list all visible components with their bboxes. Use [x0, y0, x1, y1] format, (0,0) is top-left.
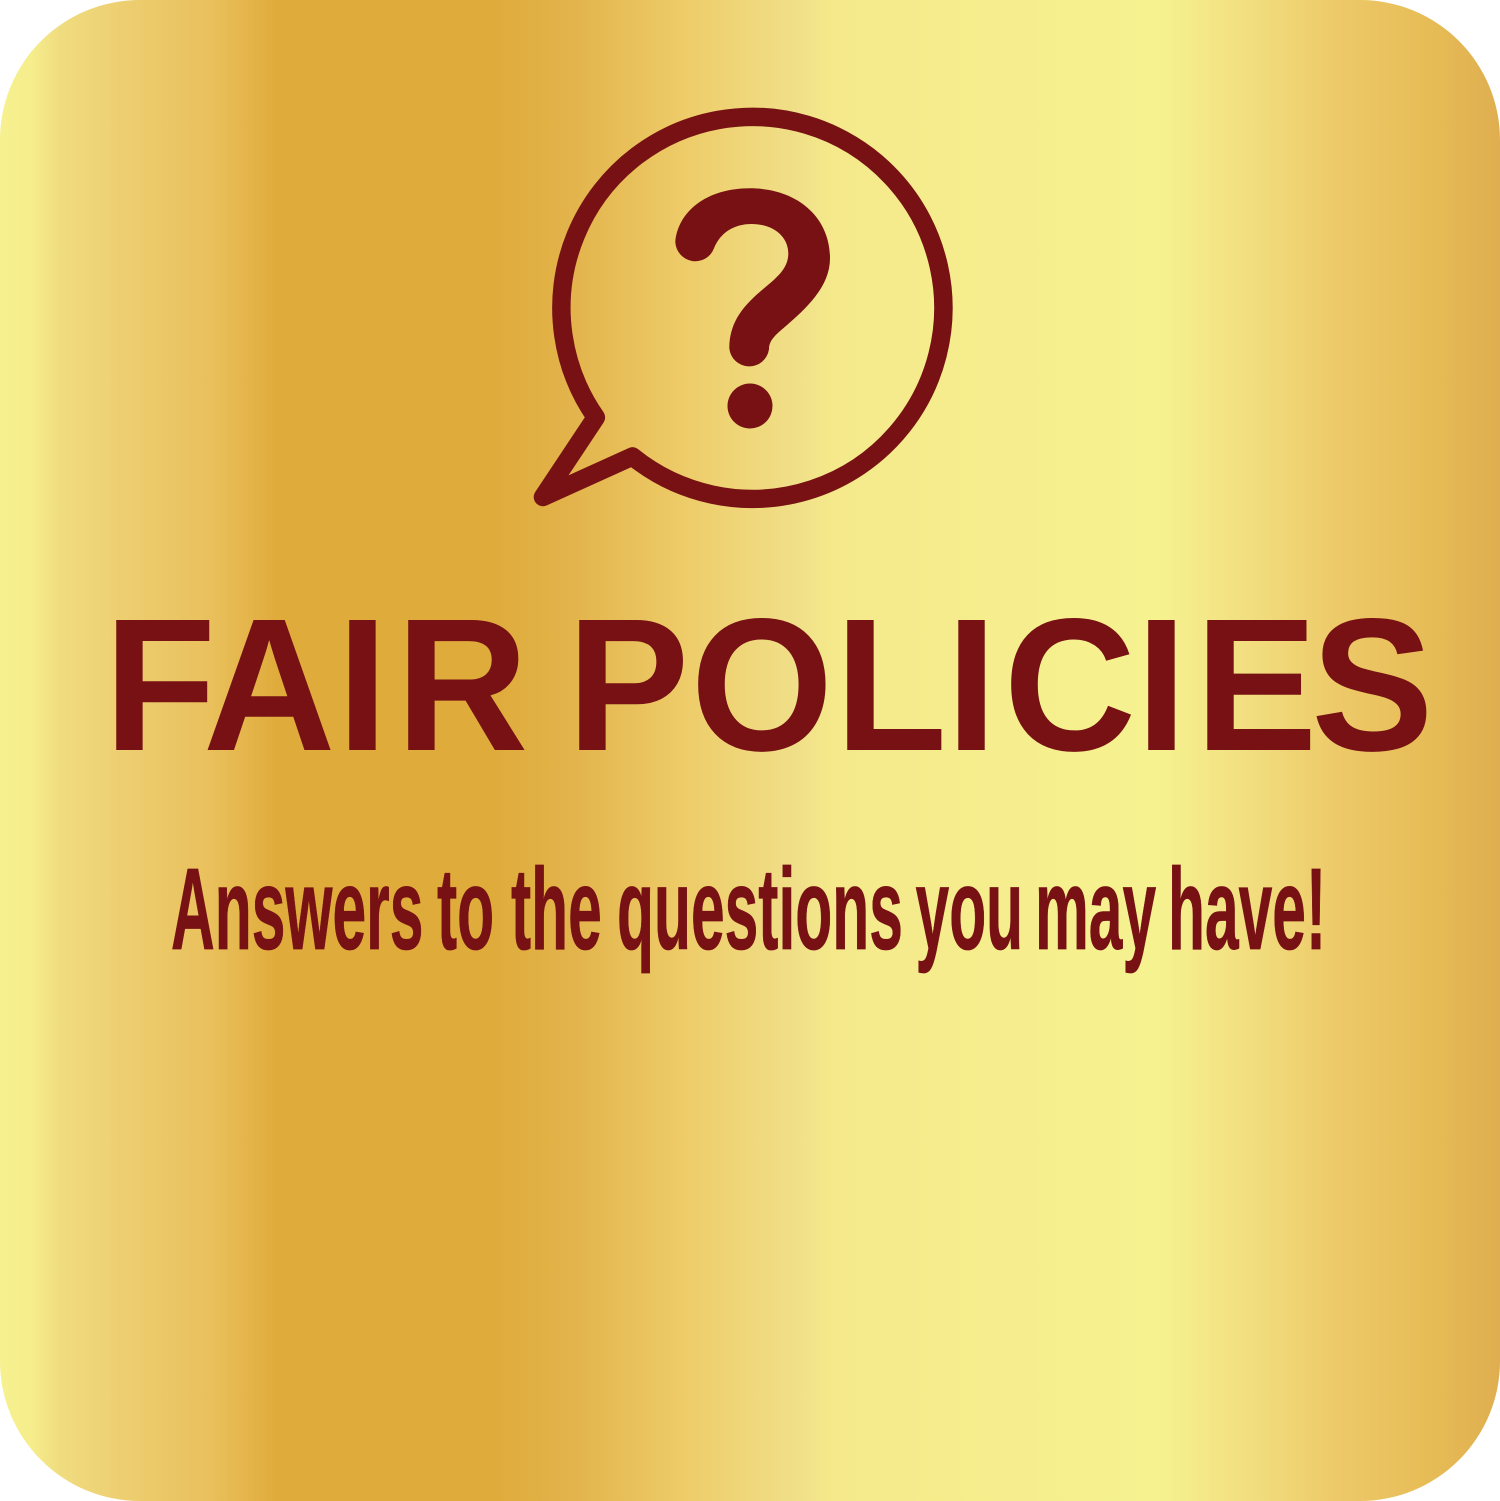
- icon: speech bubble outline: [543, 117, 943, 499]
- title: FAIR POLICIES: [104, 579, 1434, 791]
- subtitle: you: [916, 844, 1040, 974]
- subtitle: to: [437, 844, 511, 974]
- subtitle: questions: [617, 844, 920, 974]
- subtitle: may: [1035, 844, 1173, 974]
- subtitle: the: [511, 844, 619, 974]
- icon: question mark dot: [728, 384, 772, 428]
- subtitle: Answers: [171, 844, 440, 974]
- icon: speech bubble with question mark: [543, 117, 943, 499]
- icon: question mark curve: [675, 188, 830, 366]
- subtitle: have!: [1168, 844, 1326, 974]
